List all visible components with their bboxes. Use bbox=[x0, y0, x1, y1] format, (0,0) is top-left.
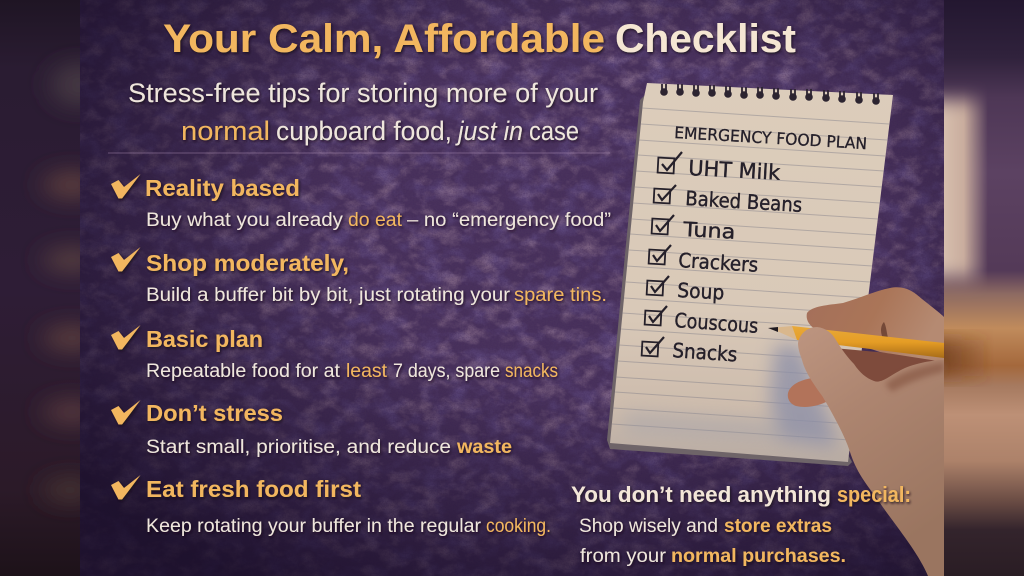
list item: Soup bbox=[647, 276, 725, 304]
list item: Baked Beans: Baked Beans bbox=[685, 186, 803, 217]
callout heading: special: bbox=[837, 482, 911, 507]
callout line 2: normal purchases. bbox=[671, 546, 846, 567]
list item: Couscous bbox=[645, 306, 759, 338]
icon: check mark bbox=[111, 400, 140, 424]
list item: Tuna bbox=[652, 215, 736, 244]
front finger, palm and wrist bbox=[798, 327, 944, 576]
divider line bbox=[108, 152, 610, 154]
item heading: Eat fresh food first bbox=[146, 476, 361, 502]
list item: Tuna: Tuna bbox=[682, 217, 736, 244]
callout heading: You don’t need anything bbox=[571, 482, 831, 507]
item description bbox=[146, 361, 558, 382]
item description: do eat bbox=[348, 210, 403, 231]
icon: check mark bbox=[111, 174, 140, 198]
notepad page stack bbox=[607, 83, 893, 466]
callout line 1 bbox=[579, 516, 832, 537]
palm crease shading bbox=[885, 362, 944, 392]
item description: Build a buffer bit by bit, just rotating your bbox=[146, 285, 511, 306]
title: Checklist bbox=[615, 17, 796, 61]
list item: Couscous: Couscous bbox=[674, 308, 759, 338]
list item: Snacks bbox=[642, 337, 738, 367]
list item: Crackers bbox=[649, 245, 759, 277]
curled fingers behind pencil bbox=[800, 345, 944, 395]
checklist item: Reality based bbox=[111, 174, 611, 231]
item heading: Don’t stress bbox=[146, 400, 283, 426]
subtitle: Stress-free tips for storing more of your bbox=[128, 78, 598, 108]
pencil bbox=[768, 326, 944, 358]
spiral binding bbox=[660, 84, 880, 105]
item heading: Basic plan bbox=[146, 326, 263, 352]
item description: waste bbox=[456, 437, 512, 458]
list item: UHT Milk: UHT Milk bbox=[688, 156, 782, 185]
title: Your Calm, Affordable bbox=[163, 17, 605, 61]
item description: snacks bbox=[505, 361, 558, 382]
list item: Crackers: Crackers bbox=[678, 248, 759, 277]
left blurred side panel bbox=[0, 0, 80, 576]
list item: Baked Beans bbox=[654, 185, 803, 217]
little finger tip bbox=[788, 378, 826, 407]
ruled lines bbox=[612, 108, 889, 440]
item description: cooking. bbox=[486, 516, 551, 537]
checklist item: Shop moderately bbox=[111, 247, 607, 306]
item heading: Shop moderately, bbox=[146, 250, 349, 276]
item description: Start small, prioritise, and reduce bbox=[146, 437, 451, 458]
item description: – no “emergency food” bbox=[407, 210, 611, 231]
item description: Keep rotating your buffer in the regular bbox=[146, 516, 482, 537]
item description: Repeatable food for at bbox=[146, 361, 341, 382]
checklist item: Eat fresh food first bbox=[111, 475, 551, 537]
paper shadows bbox=[625, 345, 838, 448]
list title: EMERGENCY FOOD PLAN bbox=[674, 123, 868, 153]
subtitle: normal bbox=[181, 116, 270, 146]
illustration: notepad with hand bbox=[607, 83, 944, 576]
checklist item: Basic plan bbox=[111, 325, 558, 382]
icon: check mark bbox=[111, 247, 140, 272]
subtitle: cupboard food, bbox=[276, 116, 452, 146]
item description: 7 days, spare bbox=[393, 361, 500, 382]
item description: spare tins. bbox=[514, 285, 607, 306]
list item: Soup: Soup bbox=[677, 278, 725, 304]
upper finger bbox=[807, 287, 944, 362]
icon: check mark bbox=[111, 325, 140, 350]
callout line 1: Shop wisely and bbox=[579, 516, 718, 537]
list item: UHT Milk bbox=[658, 152, 782, 185]
right blurred side panel bbox=[944, 0, 1024, 576]
icon: check mark bbox=[111, 475, 140, 500]
list item: Snacks: Snacks bbox=[672, 338, 738, 367]
knuckle shading bbox=[881, 322, 892, 342]
subtitle: case bbox=[529, 116, 579, 146]
title bbox=[163, 17, 796, 61]
item description bbox=[146, 210, 611, 231]
item heading: Reality based bbox=[145, 175, 300, 201]
item description: Buy what you already bbox=[146, 210, 344, 231]
hand holding pencil bbox=[768, 287, 944, 576]
checklist item: Don't stress bbox=[111, 400, 512, 458]
item description: least bbox=[346, 361, 388, 382]
callout line 1: store extras bbox=[724, 516, 832, 537]
callout line 2: from your bbox=[580, 546, 667, 567]
subtitle bbox=[128, 78, 598, 146]
callout: you don't need anything special bbox=[571, 482, 911, 567]
subtitle: just in bbox=[454, 116, 523, 146]
callout line 2 bbox=[580, 546, 846, 567]
